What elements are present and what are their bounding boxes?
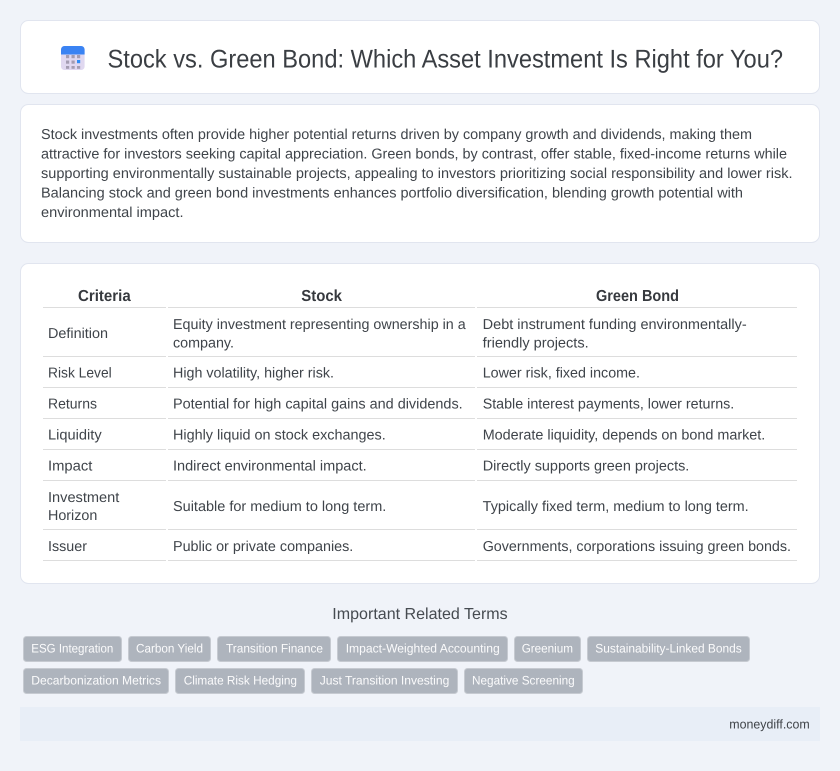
row: issuer: Issuer [48, 539, 87, 555]
row: returns [43, 397, 797, 419]
tag: Just Transition Investing: Just Transition Investing [320, 674, 449, 688]
row: liquidity [43, 428, 797, 450]
row: impact [43, 459, 797, 481]
row: risk level: Risk Level [48, 366, 112, 382]
tag: Transition Finance [218, 636, 330, 662]
row: definition [43, 317, 797, 357]
row: definition: Equity investment representing ownership in a [173, 317, 466, 333]
footer source: moneydiff.com [729, 716, 810, 731]
row: investment horizon: Suitable for medium to long term. [173, 499, 386, 515]
tag: ESG Integration [24, 636, 122, 662]
intro paragraph [41, 127, 792, 221]
row: liquidity: Moderate liquidity, depends on bond market. [483, 428, 765, 444]
row: risk level: High volatility, higher risk. [173, 366, 334, 382]
panel: intro text [20, 104, 820, 242]
tag: Sustainability-Linked Bonds [588, 636, 750, 662]
row: definition: company. [173, 335, 234, 351]
row: risk level [43, 366, 797, 388]
row: issuer: Governments, corporations issuing green bonds. [483, 539, 791, 555]
table header row [43, 288, 797, 308]
tag: Sustainability-Linked Bonds: Sustainability-Linked Bonds [595, 642, 742, 656]
row: returns: Stable interest payments, lower returns. [483, 397, 734, 413]
heading: important related terms: Important Related Terms [332, 606, 508, 623]
tags: related terms [24, 636, 750, 694]
row: definition: Definition [48, 326, 108, 342]
tag: Greenium [514, 636, 580, 662]
tag: Impact-Weighted Accounting [338, 636, 508, 662]
row: impact: Indirect environmental impact. [173, 459, 367, 475]
row: impact: Directly supports green projects. [483, 459, 689, 475]
tag: Carbon Yield [128, 636, 210, 662]
row: investment horizon: Typically fixed term, medium to long term. [483, 499, 749, 515]
tag: Just Transition Investing [312, 668, 458, 694]
tag: Impact-Weighted Accounting: Impact-Weighted Accounting [346, 642, 500, 656]
tag: Transition Finance: Transition Finance [226, 642, 323, 656]
row: issuer: Public or private companies. [173, 539, 353, 555]
row: investment horizon [43, 490, 797, 530]
row: definition: friendly projects. [483, 335, 589, 351]
tag: Negative Screening [464, 668, 582, 694]
footer bar [20, 707, 820, 741]
intro paragraph: attractive for investors seeking capital appreciation. Green bonds, by contrast, offer stable, fixed-income returns while [41, 146, 787, 162]
row: risk level: Lower risk, fixed income. [483, 366, 640, 382]
icon: calendar grid [61, 46, 85, 70]
tag: Negative Screening: Negative Screening [472, 674, 575, 688]
table header row: Green Bond [596, 288, 679, 305]
row: investment horizon: Investment [48, 490, 119, 506]
intro paragraph: Stock investments often provide higher potential returns driven by company growth and dividends, making them [41, 127, 752, 143]
tag: Greenium: Greenium [522, 642, 573, 656]
panel: header [20, 20, 820, 94]
panel: comparison table [20, 264, 820, 584]
table header row: Stock [301, 288, 342, 305]
tag: ESG Integration: ESG Integration [31, 642, 113, 656]
intro paragraph: environmental impact. [41, 205, 184, 221]
row: returns: Potential for high capital gains and dividends. [173, 397, 463, 413]
tag: Decarbonization Metrics [24, 668, 168, 694]
title: Stock vs. Green Bond: Which Asset Investment Is Right for You? [108, 45, 783, 73]
row: definition: Debt instrument funding environmentally- [483, 317, 747, 333]
tag: Climate Risk Hedging: Climate Risk Hedging [184, 674, 297, 688]
row: impact: Impact [48, 459, 92, 475]
row: returns: Returns [48, 397, 97, 413]
row: issuer [43, 539, 797, 561]
tag: Decarbonization Metrics: Decarbonization Metrics [31, 674, 161, 688]
tag: Climate Risk Hedging [176, 668, 304, 694]
row: liquidity: Liquidity [48, 428, 103, 444]
intro paragraph: supporting environmentally sustainable projects, appealing to investors prioritizing social responsibility and lower risk. [41, 166, 792, 182]
row: investment horizon: Horizon [48, 508, 97, 524]
intro paragraph: Balancing stock and green bond investments enhances portfolio diversification, blending growth potential with [41, 186, 743, 202]
table header row: Criteria [78, 288, 131, 305]
row: liquidity: Highly liquid on stock exchanges. [173, 428, 386, 444]
tag: Carbon Yield: Carbon Yield [136, 642, 203, 656]
